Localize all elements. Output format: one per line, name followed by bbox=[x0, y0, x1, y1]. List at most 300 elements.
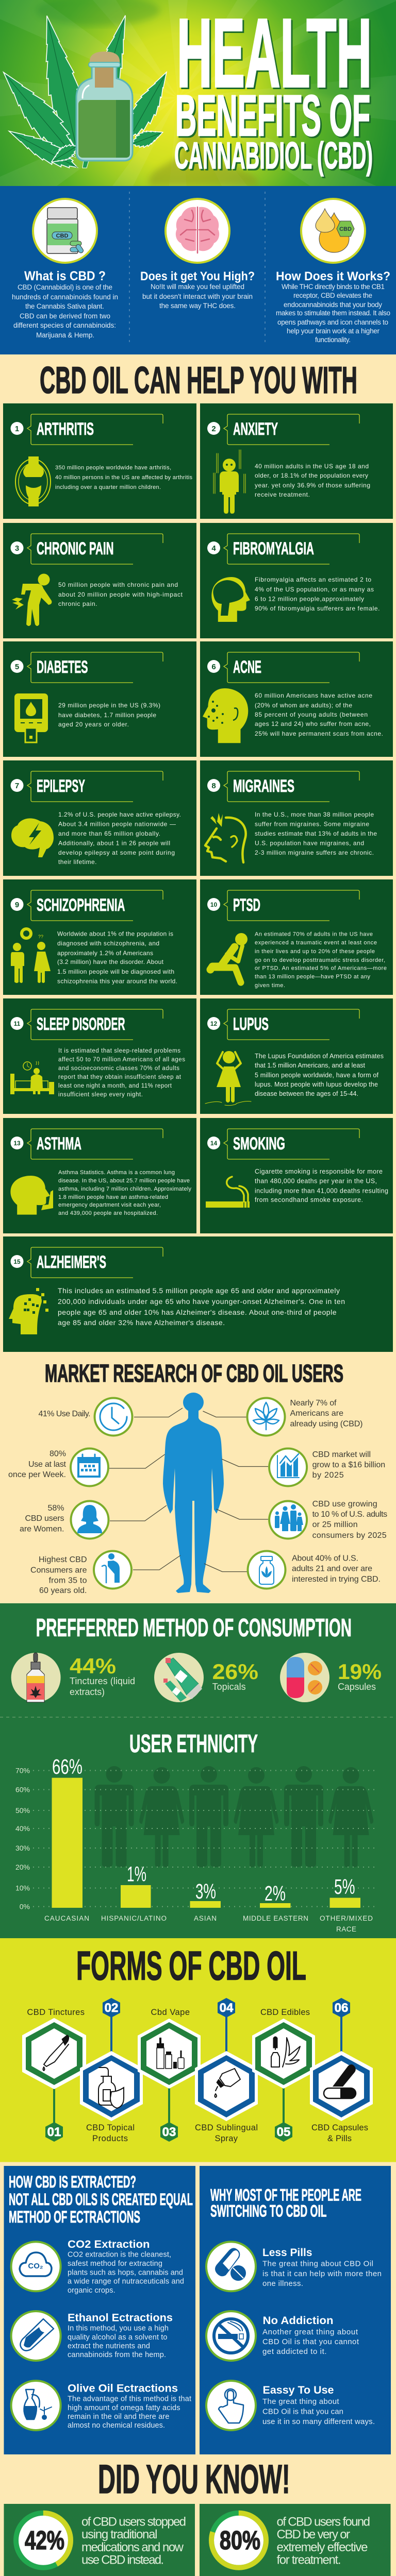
text block: disease. In the US, about 25.7 million people have bbox=[58, 1178, 190, 1184]
stat: highest consumers age: from 35 to bbox=[48, 1577, 87, 1585]
text block: emergency department visit each year, bbox=[58, 1202, 161, 1208]
text block: their lifetime. bbox=[58, 858, 97, 866]
text block: the same way THC does. bbox=[159, 302, 236, 310]
text block: age 85 and older 32% have Alzheimer's disease. bbox=[58, 1318, 225, 1327]
number badge: 06 bbox=[335, 2001, 348, 2015]
y axis labels bbox=[15, 1766, 30, 1911]
donut: 42% bbox=[16, 2513, 71, 2568]
text block: receive treatment. bbox=[255, 491, 310, 498]
method: CO2 extraction: CO2 Extraction bbox=[68, 2239, 150, 2250]
text block: and socioeconomic classes 70% of adults bbox=[58, 1065, 179, 1072]
stat: 40% interested: interested in trying CBD. bbox=[292, 1575, 381, 1584]
number badge bbox=[160, 2122, 178, 2142]
text block bbox=[142, 283, 253, 310]
icon: cigarette bbox=[206, 1177, 250, 1208]
stat: 10% of adults: consumers by 2025 bbox=[312, 1531, 387, 1540]
form 03: vape bbox=[138, 2008, 201, 2142]
method: ethanol: extract the nutrients and bbox=[68, 2342, 150, 2350]
heading: METHOD OF ECTRACTIONS bbox=[9, 2208, 140, 2226]
text block: hundreds of cannabinoids found in bbox=[12, 293, 118, 301]
stat: 44% tinctures: 44% bbox=[70, 1654, 116, 1678]
heading: EPILEPSY bbox=[37, 776, 85, 796]
icon: oil drops bbox=[316, 209, 354, 252]
x axis labels: MIDDLE EASTERN bbox=[243, 1914, 308, 1922]
text block: It is estimated that sleep-related problems bbox=[58, 1048, 180, 1054]
text block: the Cannabis Sativa plant. bbox=[25, 302, 104, 310]
text block: affect 50 to 70 million Americans of all ages bbox=[58, 1057, 185, 1063]
number badge bbox=[10, 541, 24, 554]
text block: 25% will have permanent scars from acne. bbox=[255, 730, 383, 737]
text block bbox=[276, 283, 390, 344]
number badge: 02 bbox=[105, 2001, 118, 2015]
stat: 19% capsules: 19% bbox=[338, 1659, 382, 1684]
method: olive oil: high amount of omega fatty acids bbox=[68, 2404, 180, 2412]
bar values bbox=[52, 1755, 355, 1905]
text block: schizophrenia this year around the world. bbox=[57, 978, 177, 985]
icon: person with back pain bbox=[12, 574, 52, 626]
illustration: oil bottle bbox=[76, 52, 133, 161]
text block: year. yet only 36.9% of those suffering bbox=[255, 482, 370, 489]
label bbox=[311, 2123, 368, 2143]
label: & Pills bbox=[327, 2134, 352, 2143]
stat: 40% interested: adults 21 and over are bbox=[292, 1565, 372, 1573]
stat: nearly 7% of Americans: Americans are bbox=[290, 1409, 343, 1418]
text block: go on to develop posttraumatic stress disorder, bbox=[255, 957, 385, 963]
text block: 2-3 million migraine suffers are chronic. bbox=[255, 849, 374, 856]
text block bbox=[255, 692, 383, 737]
reason: easy to use: Eassy To Use bbox=[263, 2384, 334, 2396]
panel: alzheimer's bbox=[3, 1236, 393, 1352]
icon: head with brain bbox=[211, 577, 250, 622]
text block bbox=[255, 931, 387, 989]
reason: less pills: The great thing about CBD Oil bbox=[262, 2260, 373, 2268]
text block: 85 percent of young adults (between bbox=[255, 711, 368, 718]
stat: 26% topicals: 26% bbox=[212, 1659, 258, 1684]
stat: 19% capsules: Capsules bbox=[338, 1682, 376, 1692]
x axis labels: CAUCASIAN bbox=[44, 1914, 89, 1922]
number badge bbox=[207, 1137, 220, 1149]
stat: 26% topicals: Topicals bbox=[212, 1682, 246, 1692]
number badge: 01 bbox=[47, 2125, 61, 2139]
text block: 1.5 million people will be diagnosed with bbox=[57, 968, 174, 975]
text block: CBD can be derived from two bbox=[20, 312, 110, 320]
reason: easy to use: CBD Oil is that you can bbox=[262, 2408, 343, 2416]
chart: user ethnicity bbox=[15, 1755, 377, 1933]
text block: 40 million adults in the US age 18 and bbox=[255, 463, 369, 470]
text block bbox=[12, 283, 118, 339]
heading: ARTHRITIS bbox=[37, 419, 94, 439]
icon: glucose meter bbox=[14, 693, 48, 742]
reason: no addiction: No Addiction bbox=[263, 2315, 333, 2327]
panel: consumption and ethnicity bbox=[0, 1603, 396, 1938]
text block: or PTSD. An estimated 5% of Americans—more bbox=[255, 965, 387, 972]
bars bbox=[52, 1778, 360, 1908]
label bbox=[195, 2123, 258, 2143]
number badge bbox=[10, 1255, 24, 1268]
text block bbox=[276, 2515, 370, 2567]
number badge bbox=[10, 422, 24, 435]
heading: SMOKING bbox=[233, 1134, 285, 1154]
number badge bbox=[207, 779, 220, 792]
stat: 10% of adults: CBD use growing bbox=[312, 1500, 377, 1509]
text block bbox=[81, 2515, 186, 2567]
text block: makes to stimulate them instead. It also bbox=[276, 309, 390, 317]
text block: chronic pain. bbox=[58, 600, 97, 607]
text block: 1.2% of U.S. people have active epilepsy. bbox=[58, 811, 181, 818]
heading: CHRONIC PAIN bbox=[37, 539, 113, 558]
text block: using traditional bbox=[81, 2528, 158, 2541]
icon: vape kit bbox=[157, 2038, 184, 2069]
text block: (3.2 million) have the disorder. About bbox=[57, 958, 164, 965]
x axis labels bbox=[44, 1914, 373, 1933]
stat: 58% women: 58% bbox=[47, 1504, 64, 1513]
number badge bbox=[10, 1137, 24, 1149]
method: CO2 extraction: CO2 extraction is the cleanest, bbox=[68, 2250, 171, 2259]
icon: bottle and leaf bbox=[271, 2037, 300, 2067]
stat: 19% capsules bbox=[280, 1653, 382, 1702]
panel: arthritis bbox=[3, 403, 196, 519]
bar values: 1% bbox=[127, 1862, 146, 1886]
text block: report that they obtain insufficient sleep at bbox=[58, 1074, 182, 1080]
text block: Asthma Statistics. Asthma is a common lung bbox=[58, 1170, 175, 1176]
number badge bbox=[207, 541, 220, 554]
text block: help your brain work at a higher bbox=[287, 327, 380, 335]
heading: SLEEP DISORDER bbox=[37, 1014, 125, 1034]
reason: easy to use bbox=[206, 2381, 375, 2430]
icon: capsules bbox=[324, 2064, 356, 2098]
stat: highest consumers age bbox=[30, 1551, 131, 1595]
number badge: 8 bbox=[211, 782, 216, 790]
icon: pump bottle with shield bbox=[98, 2067, 124, 2108]
text block: 40 million persons in the US are affected by arthritis bbox=[55, 474, 193, 481]
number badge: 04 bbox=[220, 2001, 234, 2015]
text block: older, or 18.1% of the population every bbox=[255, 472, 368, 479]
method: ethanol: Ethanol Ectractions bbox=[68, 2312, 173, 2324]
text block: ages 12 and 24) who suffer from acne, bbox=[255, 720, 371, 727]
text block: diagnosed with schizophrenia, and bbox=[57, 940, 159, 947]
human figure bbox=[163, 1393, 224, 1593]
text block: have diabetes, 1.7 million people bbox=[58, 711, 156, 719]
donut: 80%: 80% bbox=[220, 2526, 260, 2555]
icon: anxious person bbox=[213, 450, 245, 514]
icon: oil drops: CBD bbox=[339, 226, 352, 232]
number badge: 11 bbox=[14, 1020, 21, 1027]
text block bbox=[255, 811, 377, 856]
text block: 350 million people worldwide have arthritis, bbox=[55, 465, 171, 471]
stat card: 42% bbox=[4, 2504, 195, 2576]
icon: brain bbox=[176, 207, 219, 253]
label: CBD Sublingual bbox=[195, 2123, 258, 2132]
reason: easy to use: use it in so many different ways. bbox=[262, 2417, 375, 2426]
column: how does it work bbox=[276, 199, 390, 344]
panel: forms of CBD oil bbox=[0, 1938, 396, 2162]
method: CO2 extraction: plants such as hops, cannabis and bbox=[68, 2269, 183, 2277]
text block: While THC directly binds to the CB1 bbox=[282, 283, 385, 291]
number badge bbox=[333, 1998, 350, 2018]
form 05: edibles bbox=[252, 2008, 315, 2142]
icon: dropper bbox=[43, 2035, 69, 2071]
text block: least one night a month, and 11% report bbox=[58, 1083, 172, 1089]
method: olive oil bbox=[11, 2381, 191, 2430]
text block: CBD be very or bbox=[276, 2528, 350, 2541]
panel: how CBD is extracted bbox=[4, 2166, 195, 2454]
stat: 80% use weekly: 80% bbox=[50, 1450, 66, 1458]
icon: person awake in bed bbox=[10, 1061, 54, 1094]
icon: face with acne bbox=[203, 688, 248, 743]
x axis labels: OTHER/MIXED bbox=[320, 1914, 373, 1922]
stat card: 80% bbox=[200, 2504, 391, 2576]
method: olive oil: The advantage of this method is that bbox=[68, 2395, 191, 2403]
text block: for treatment. bbox=[276, 2553, 341, 2567]
bar values: 2% bbox=[265, 1882, 286, 1905]
text block: 29 million people in the US (9.3%) bbox=[58, 702, 160, 709]
icon: two people with thought bubble: ?? bbox=[38, 934, 43, 939]
stat: 58% women: are Women. bbox=[20, 1525, 64, 1533]
stat: $16 billion market bbox=[269, 1449, 385, 1486]
text block: given time. bbox=[255, 982, 285, 989]
heading: Does it get You High? bbox=[140, 269, 255, 283]
reason: no addiction bbox=[206, 2311, 359, 2361]
text block: aged 20 years or older. bbox=[58, 721, 129, 728]
number badge bbox=[207, 422, 220, 435]
number badge: 05 bbox=[277, 2125, 290, 2139]
text block: in their lives and up to 20% of these people bbox=[255, 948, 375, 955]
reason: less pills bbox=[206, 2242, 382, 2291]
panel: why people are switching bbox=[200, 2166, 391, 2454]
stat: $16 billion market: grow to a $16 billion bbox=[312, 1461, 385, 1469]
heading: MIGRAINES bbox=[233, 776, 294, 796]
number badge bbox=[103, 1998, 120, 2018]
reason: no addiction: Another great thing about bbox=[262, 2328, 358, 2336]
stat: 58% women: CBD users bbox=[25, 1514, 64, 1523]
method: CO2 extraction: organic crops. bbox=[68, 2286, 116, 2295]
y axis labels: 10% bbox=[15, 1884, 30, 1892]
panel: migraines bbox=[200, 760, 393, 876]
number badge: 14 bbox=[210, 1140, 217, 1147]
text block bbox=[255, 463, 370, 498]
text block: from secondhand smoke exposure. bbox=[255, 1196, 363, 1204]
icon: knee joint bbox=[15, 456, 51, 506]
panel: fibromyalgia bbox=[200, 523, 393, 638]
text block: lupus. Most people with lupus develop the bbox=[255, 1081, 378, 1088]
panel: asthma bbox=[3, 1118, 196, 1233]
panel: epilepsy bbox=[3, 760, 196, 876]
number badge: 15 bbox=[13, 1258, 21, 1265]
label: Spray bbox=[214, 2134, 238, 2143]
stat: 80% use weekly: Use at last bbox=[28, 1460, 67, 1469]
icon: distressed woman bbox=[205, 1051, 251, 1106]
icon: head with inhaler bbox=[10, 1176, 53, 1215]
reason: no addiction: CBD Oil is that you cannot bbox=[262, 2337, 359, 2346]
number badge: 4 bbox=[211, 544, 216, 553]
icon: head dissolving into pixels bbox=[9, 1288, 48, 1334]
stat: 80% use weekly: once per Week. bbox=[8, 1470, 66, 1479]
number badge: 3 bbox=[15, 544, 19, 553]
text block: Worldwide about 1% of the population is bbox=[57, 930, 173, 938]
text block bbox=[58, 1286, 345, 1327]
text block bbox=[58, 1048, 185, 1098]
text block: develop epilepsy at some point during bbox=[58, 849, 175, 856]
stat: $16 billion market: CBD market will bbox=[312, 1450, 371, 1459]
text block: CBD (Cannabidiol) is one of the bbox=[18, 283, 112, 291]
x axis labels: RACE bbox=[336, 1925, 356, 1933]
form 01: tinctures bbox=[23, 2008, 86, 2142]
label: Products bbox=[92, 2134, 128, 2143]
text block bbox=[58, 1170, 192, 1216]
stat: 41% use daily: 41% Use Daily. bbox=[38, 1410, 91, 1418]
text block: including over a quarter million children. bbox=[55, 484, 161, 490]
heading: LUPUS bbox=[233, 1014, 269, 1034]
panel: smoking bbox=[200, 1118, 393, 1233]
stat: 44% tinctures: Tinctures (liquid bbox=[70, 1676, 135, 1686]
form 02: topical products bbox=[80, 1998, 143, 2143]
method: olive oil: Olive Oil Ectractions bbox=[68, 2383, 178, 2395]
reason: less pills: Less Pills bbox=[262, 2247, 312, 2259]
stat: highest consumers age: Consumers are bbox=[30, 1566, 87, 1574]
heading: NOT ALL CBD OILS IS CREATED EQUAL bbox=[9, 2190, 193, 2209]
text block: and more than 65 million globally. bbox=[58, 830, 160, 837]
text block: This includes an estimated 5.5 million people age 65 and older and approximately bbox=[58, 1286, 340, 1295]
text block: About 3.4 million people nationwide — bbox=[58, 820, 176, 827]
label bbox=[86, 2123, 135, 2143]
text block: endocannabinoids that your body bbox=[284, 301, 382, 309]
method: CO2 extraction: a wide range of nutraceuticals and bbox=[68, 2277, 184, 2285]
number badge: 1 bbox=[15, 425, 19, 433]
heading: ASTHMA bbox=[37, 1134, 81, 1154]
number badge bbox=[207, 1017, 220, 1030]
reason: no addiction: get addicted to it. bbox=[262, 2347, 327, 2356]
number badge bbox=[218, 1998, 235, 2018]
text block: people age 65 and older 10% has Alzheimer's disease. About one-third of people bbox=[58, 1308, 337, 1316]
text block: opens pathways and icon channels to bbox=[277, 318, 388, 326]
text block bbox=[57, 930, 177, 985]
text block: but it doesn't interact with your brain bbox=[142, 293, 253, 300]
form 06: capsules and pills bbox=[310, 1998, 373, 2143]
icon: brain with lightning bbox=[11, 818, 54, 857]
text block: medications and now bbox=[81, 2540, 184, 2554]
number badge: 12 bbox=[210, 1020, 217, 1027]
method: ethanol: cannabinoids from the hemp. bbox=[68, 2351, 166, 2359]
panel: intro bbox=[0, 186, 396, 354]
y axis labels: 40% bbox=[15, 1824, 30, 1833]
background people silhouettes bbox=[95, 1766, 373, 1867]
reason: less pills: one illness. bbox=[262, 2279, 303, 2288]
stat: 26% topicals bbox=[154, 1653, 258, 1702]
stat: 10% of adults: or 25 million bbox=[312, 1520, 358, 1529]
text block: (20% of whom are adults); of the bbox=[255, 702, 352, 709]
number badge: 6 bbox=[211, 663, 216, 671]
panel: lupus bbox=[200, 998, 393, 1114]
text block: Additionally, about 1 in 26 people will bbox=[58, 840, 170, 847]
stat: 10% of adults bbox=[269, 1500, 387, 1540]
label: CBD Topical bbox=[86, 2123, 135, 2132]
text block: than 480,000 deaths per year in the US, bbox=[255, 1178, 377, 1185]
y axis labels: 60% bbox=[15, 1786, 30, 1794]
label: CBD Tinctures bbox=[27, 2008, 85, 2017]
stat: nearly 7% of Americans bbox=[248, 1398, 363, 1435]
method: CO2 extraction bbox=[11, 2239, 184, 2295]
stat: 40% interested bbox=[248, 1551, 381, 1589]
number badge bbox=[10, 898, 24, 911]
text block: functionality. bbox=[315, 336, 351, 344]
number badge bbox=[207, 660, 220, 673]
icon: dropper bottle bbox=[214, 2069, 240, 2097]
stat: nearly 7% of Americans: already using (CBD) bbox=[290, 1420, 363, 1428]
number badge: 9 bbox=[15, 901, 19, 909]
text block: different species of cannabinoids: bbox=[13, 321, 116, 329]
text block: 1.8 million people have an asthma-related bbox=[58, 1194, 168, 1200]
stat: nearly 7% of Americans: Nearly 7% of bbox=[290, 1399, 337, 1408]
text block: than 13 million people—have PTSD at any bbox=[255, 974, 370, 980]
number badge bbox=[10, 779, 24, 792]
y axis labels: 70% bbox=[15, 1766, 30, 1774]
text block bbox=[255, 1168, 388, 1204]
icon: CBD pill bottle bbox=[47, 208, 84, 254]
panel: sleep disorder bbox=[3, 998, 196, 1114]
heading: What is CBD ? bbox=[24, 269, 106, 283]
text block: 4% of the US population, or as many as bbox=[255, 586, 374, 593]
stat: 80% use weekly bbox=[8, 1449, 108, 1486]
text block: U.S. population have migraines, and bbox=[255, 840, 364, 847]
column: does it get you high bbox=[140, 199, 255, 310]
method: olive oil: almost no chemical residues. bbox=[68, 2421, 165, 2430]
number badge: 10 bbox=[210, 901, 217, 908]
text block: extremely effective bbox=[276, 2540, 368, 2554]
panel: anxiety bbox=[200, 403, 393, 519]
text block: studies estimate that 13% of adults in the bbox=[255, 830, 377, 837]
reason: less pills: is that it can help with more then bbox=[262, 2269, 382, 2278]
method: ethanol bbox=[11, 2311, 173, 2361]
donut: 80% bbox=[211, 2513, 266, 2568]
text block: that 1.5 million Americans, and at least bbox=[255, 1062, 366, 1069]
text block bbox=[255, 576, 380, 612]
text block: suffer from migraines. Some migraine bbox=[255, 820, 369, 827]
text block: asthma, including 7 million children. Approximately bbox=[58, 1186, 192, 1192]
method: ethanol: In this method, you use a high bbox=[68, 2325, 169, 2333]
text block: receptor, CBD elevates the bbox=[293, 292, 372, 299]
text block: insufficient sleep every night. bbox=[58, 1092, 143, 1098]
icon: two people with thought bubble bbox=[11, 927, 51, 983]
panel: PTSD bbox=[200, 879, 393, 995]
text block: No!It will make you feel uplifted bbox=[151, 283, 244, 291]
y axis labels: 0% bbox=[20, 1903, 30, 1911]
stat: 40% interested: About 40% of U.S. bbox=[292, 1554, 358, 1563]
text block: 6 to 12 million people,approximately bbox=[255, 596, 364, 603]
panel: chronic pain bbox=[3, 523, 196, 638]
stat: $16 billion market: by 2025 bbox=[312, 1471, 344, 1480]
text block: 50 million people with chronic pain and bbox=[58, 581, 178, 588]
heading: user ethnicity: USER ETHNICITY bbox=[129, 1730, 258, 1758]
label: CBD Capsules bbox=[311, 2123, 368, 2132]
text block bbox=[58, 581, 183, 607]
bar values: 66% bbox=[52, 1755, 82, 1778]
number badge bbox=[275, 2122, 292, 2142]
number badge: 2 bbox=[211, 425, 216, 433]
stat: 44% tinctures: extracts) bbox=[70, 1687, 105, 1697]
number badge bbox=[45, 2122, 63, 2142]
panel: diabetes bbox=[3, 641, 196, 757]
stat: 44% tinctures bbox=[11, 1653, 135, 1702]
heading: PTSD bbox=[233, 895, 260, 915]
text block bbox=[58, 811, 181, 866]
heading: ALZHEIMER'S bbox=[37, 1252, 106, 1272]
text block: and 439,000 people are hospitalized. bbox=[58, 1210, 158, 1216]
x axis labels: ASIAN bbox=[194, 1914, 217, 1922]
y axis labels: 50% bbox=[15, 1806, 30, 1815]
number badge: 5 bbox=[15, 663, 19, 671]
method: CO2 extraction: safest method for extracting bbox=[68, 2260, 162, 2268]
stat: 10% of adults: to 10 % of U.S. adults bbox=[312, 1510, 387, 1519]
